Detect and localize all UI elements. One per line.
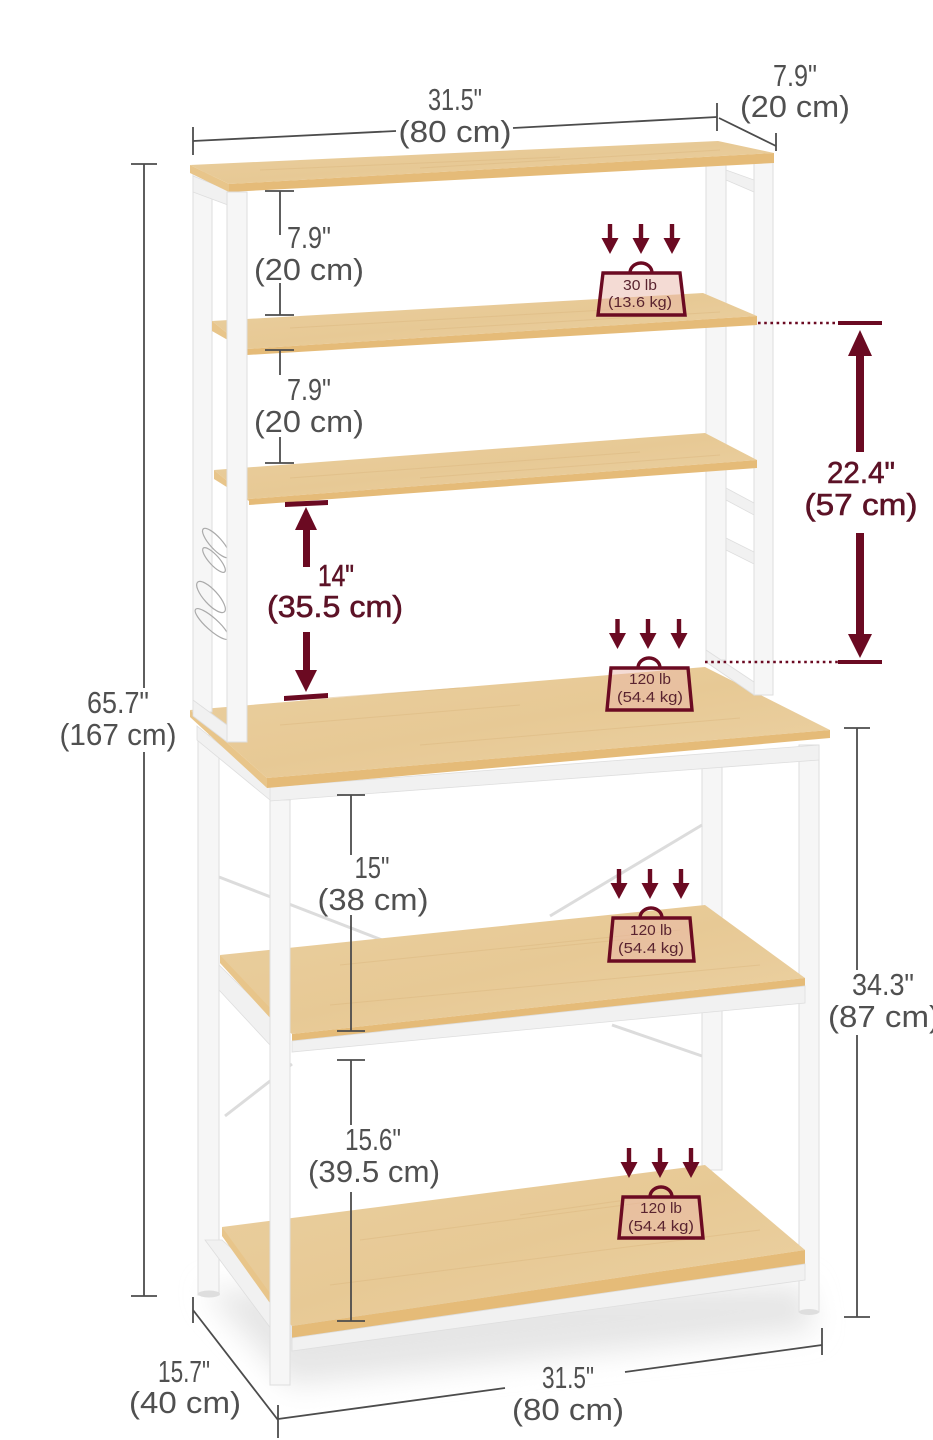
cross braces — [219, 825, 702, 1116]
dimension: second shelf gap: (20 cm) — [254, 404, 364, 439]
dimension: top depth: 7.9" — [773, 58, 817, 93]
dimension: base width: 31.5" — [542, 1360, 594, 1395]
dimension: total height: 65.7" — [87, 685, 149, 720]
dimension: upper shelf gap: 7.9" — [287, 220, 331, 255]
dimension: 15 inch gap — [318, 795, 428, 1031]
dimension: 15.6 inch gap — [308, 1060, 440, 1321]
dimension: top width: 31.5" — [428, 82, 482, 117]
weight limit: middle shelf 120 lb: 120 lb — [630, 922, 672, 939]
bottom shelf — [205, 1165, 805, 1351]
dimension: upper shelf gap: (20 cm) — [254, 252, 364, 287]
hutch third shelf — [214, 433, 757, 505]
dimension: total height — [60, 164, 176, 1296]
dimension: 14 inch clearance: 14" — [318, 558, 354, 593]
dimension: 22.4 inch clearance: 22.4" — [827, 455, 895, 490]
hutch second shelf — [212, 293, 757, 355]
dimension: worktop height: 34.3" — [852, 967, 914, 1002]
dimension: top depth: (20 cm) — [740, 89, 850, 124]
dimension: base depth: (40 cm) — [129, 1385, 241, 1420]
weight limit: middle shelf 120 lb — [609, 869, 694, 961]
weight limit: 30 lb: (13.6 kg) — [608, 294, 672, 311]
dimension: 15.6 inch gap: 15.6" — [345, 1122, 401, 1157]
dimension: top width: (80 cm) — [398, 114, 512, 149]
dimension: 22.4 inch clearance — [705, 321, 918, 664]
dimension: base depth — [129, 1297, 278, 1420]
dimension: 15 inch gap: (38 cm) — [318, 882, 428, 917]
dimension: 22.4 inch clearance: (57 cm) — [804, 487, 918, 522]
weight limit: worktop 120 lb: (54.4 kg) — [617, 689, 683, 706]
weight limit: 30 lb — [598, 224, 685, 315]
hutch back uprights — [193, 160, 773, 742]
weight limit: bottom shelf 120 lb: (54.4 kg) — [628, 1218, 694, 1235]
dimension: top depth — [719, 58, 850, 151]
dimension: second shelf gap: 7.9" — [287, 372, 331, 407]
dimension: base depth: 15.7" — [158, 1354, 210, 1389]
dimension: top width — [193, 82, 717, 155]
weight limit: worktop 120 lb — [607, 619, 692, 710]
weight limit: worktop 120 lb: 120 lb — [629, 671, 671, 688]
weight limit: bottom shelf 120 lb — [619, 1148, 703, 1238]
main worktop — [190, 667, 830, 788]
lower front leg — [270, 785, 290, 1385]
weight limit: 30 lb: 30 lb — [623, 277, 657, 294]
lower back legs — [198, 735, 819, 1315]
dimension: worktop height: (87 cm) — [828, 999, 933, 1034]
dimension: upper shelf gap — [254, 191, 364, 315]
dimension: total height: (167 cm) — [60, 717, 176, 752]
S hooks — [192, 525, 233, 643]
weight limit: middle shelf 120 lb: (54.4 kg) — [618, 940, 684, 957]
floor shadow — [205, 1285, 815, 1385]
dimension: base width: (80 cm) — [512, 1392, 624, 1427]
dimension: 14 inch clearance — [267, 500, 403, 701]
shelving unit — [190, 141, 830, 1385]
dimension: 15 inch gap: 15" — [354, 850, 390, 885]
middle shelf — [219, 905, 805, 1052]
dimension: 15.6 inch gap: (39.5 cm) — [308, 1154, 440, 1189]
main worktop frame — [197, 726, 819, 801]
dimension: base width — [278, 1328, 822, 1438]
hutch front left upright — [227, 192, 247, 742]
dimension: 14 inch clearance: (35.5 cm) — [267, 589, 403, 624]
dimension: worktop height — [828, 728, 933, 1317]
dimension: second shelf gap — [254, 350, 364, 463]
weight limit: bottom shelf 120 lb: 120 lb — [640, 1200, 682, 1217]
hutch top shelf — [190, 141, 774, 192]
